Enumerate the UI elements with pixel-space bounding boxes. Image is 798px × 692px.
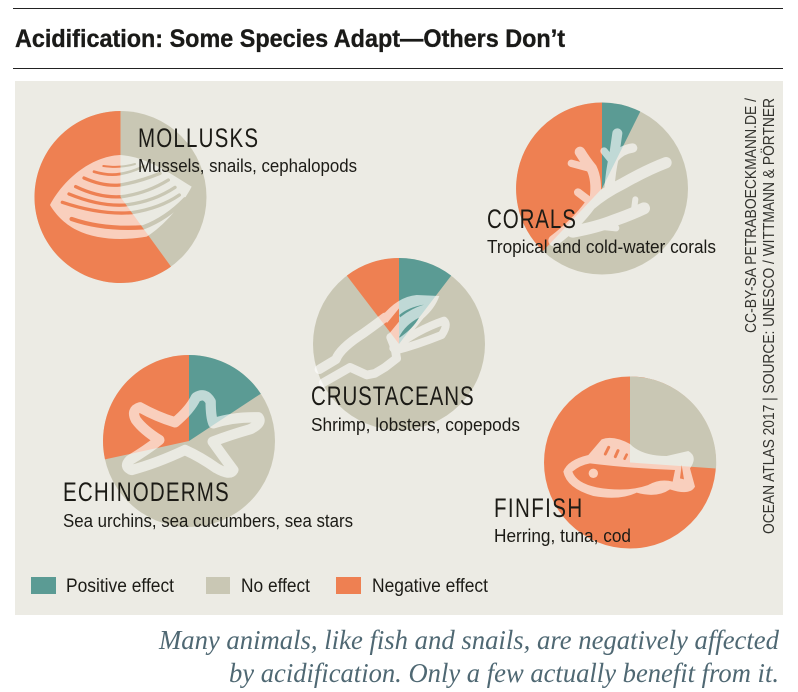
- panel: crustaceans: [311, 258, 520, 435]
- label: corals: CORALS: [487, 204, 576, 235]
- legend: [31, 575, 489, 597]
- pie: finfish: [544, 376, 716, 548]
- icon: coral: [554, 133, 666, 241]
- label: crustaceans: CRUSTACEANS: [311, 381, 474, 412]
- label: mollusks: MOLLUSKS: [138, 123, 258, 154]
- pie: echinoderms: [103, 355, 275, 527]
- description: finfish: Herring, tuna, cod: [494, 525, 631, 546]
- description: corals: Tropical and cold-water corals: [487, 236, 716, 257]
- caption: [158, 625, 779, 688]
- label: finfish: FINFISH: [494, 493, 582, 524]
- pie: corals: [516, 102, 688, 274]
- legend: negative effect: Negative effect: [372, 575, 489, 597]
- description: echinoderms: Sea urchins, sea cucumbers, sea stars: [63, 510, 353, 531]
- source credit: [743, 97, 778, 534]
- title: Acidification: Some Species Adapt—Others Don’t: [15, 25, 566, 53]
- panel: corals: [487, 102, 716, 274]
- pie: crustaceans: [313, 258, 485, 430]
- panel: finfish: [494, 376, 716, 548]
- label: echinoderms: ECHINODERMS: [63, 477, 229, 508]
- legend: no effect: No effect: [241, 575, 311, 597]
- source credit: OCEAN ATLAS 2017 | SOURCE: UNESCO / WITTMANN & PÖRTNER: [760, 98, 778, 534]
- legend: positive effect: Positive effect: [66, 575, 175, 597]
- description: mollusks: Mussels, snails, cephalopods: [138, 155, 357, 176]
- icon: fish: [563, 438, 695, 498]
- icon: shell: [50, 155, 192, 239]
- legend: positive effect: [31, 575, 175, 597]
- panel: echinoderms: [63, 355, 353, 531]
- caption: by acidification. Only a few actually benefit from it.: [229, 658, 779, 688]
- icon: lobster: [319, 295, 446, 383]
- icon: sea star: [127, 395, 259, 473]
- source credit: CC-BY-SA PETRABOECKMANN.DE /: [743, 97, 760, 333]
- pie: mollusks: [34, 111, 206, 283]
- panel background: [15, 81, 783, 615]
- caption: Many animals, like fish and snails, are negatively affected: [158, 625, 779, 655]
- legend: no effect: [206, 575, 311, 597]
- panel: mollusks: [34, 111, 357, 283]
- description: crustaceans: Shrimp, lobsters, copepods: [311, 414, 520, 435]
